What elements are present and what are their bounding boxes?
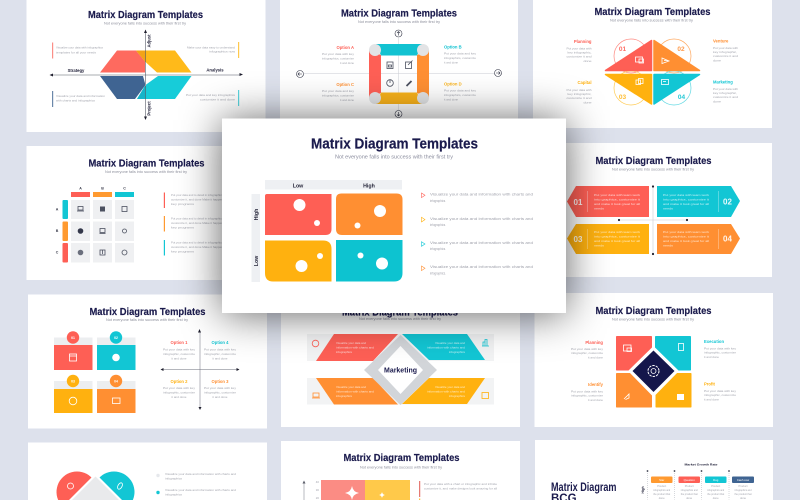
bullets and notes: infographics <box>165 476 183 480</box>
bullet 3: Visualize your data and information with charts and <box>430 241 533 245</box>
circle icons <box>68 482 123 490</box>
heading: Matrix Diagram Templates <box>594 6 711 18</box>
panel: main matrix slide <box>222 118 566 313</box>
side notes: customize it, and done Make it happen <box>171 198 223 202</box>
parallelogram yellow: infographics <box>449 394 466 398</box>
grid header and rows: A <box>56 208 59 212</box>
column text: done <box>686 496 693 500</box>
grid header and rows <box>56 186 134 262</box>
subtitle: Not everyone falls into success with their first try <box>105 170 187 174</box>
side notes: key programs <box>171 250 195 254</box>
option labels: Option 1 <box>171 340 188 345</box>
column text: infographics and <box>653 488 671 492</box>
block 02 <box>97 331 136 370</box>
parallelogram orange: Visualize your data and <box>336 385 366 389</box>
tab 03: needs <box>594 244 605 248</box>
option labels: infographic, customize <box>204 352 236 356</box>
option labels: Option 2 <box>171 379 188 384</box>
side notes: Visualize your data and information <box>56 94 105 98</box>
labels: Execution <box>704 339 724 344</box>
parallelogram red <box>316 334 398 361</box>
red circle <box>56 471 98 500</box>
labels: Venture <box>713 38 729 44</box>
petal numbers <box>619 46 685 101</box>
axes <box>618 185 688 255</box>
tab 04: and make it look great for all <box>663 239 709 243</box>
marketing diamond <box>364 335 437 405</box>
tab 02: Put your data with team work <box>663 193 710 197</box>
option labels: infographics, customize <box>322 94 354 98</box>
tab 01: needs <box>594 206 605 210</box>
axis: 20 <box>316 496 319 500</box>
tab 04: into graphics, customize it <box>663 234 709 238</box>
block 03: 03 <box>71 379 75 383</box>
parallelogram red: information with charts and <box>336 346 374 350</box>
bullet 2: infographics. <box>430 223 446 227</box>
heading: Matrix Diagram Templates <box>344 452 460 464</box>
option labels: Option B <box>444 44 462 50</box>
column text: the product that <box>707 492 724 496</box>
column header: Low <box>293 184 304 190</box>
labels: customize it and <box>566 96 592 100</box>
option labels: it and done <box>444 60 458 64</box>
column text: Product <box>657 484 666 488</box>
parallelogram orange: information with charts and <box>336 390 374 394</box>
parallelogram teal <box>402 334 485 360</box>
column text: done <box>659 496 665 500</box>
option labels: it and done <box>444 98 458 102</box>
quadrant: high high <box>336 194 402 235</box>
block 04 <box>97 375 136 413</box>
labels: key infographic, <box>713 50 737 54</box>
subtitle: Not everyone falls into success with their first try <box>359 317 441 321</box>
option labels: infographic, customize <box>204 390 236 394</box>
option labels: it and done <box>340 98 354 102</box>
column text: the product that <box>653 492 670 496</box>
side notes <box>52 42 239 107</box>
side notes: Make your data easy to understand <box>187 46 235 50</box>
labels: it and done <box>588 356 603 360</box>
panel: hexagon axis slide <box>26 0 266 132</box>
parallelogram orange <box>316 378 398 404</box>
side icons <box>312 340 489 398</box>
axis labels: Project <box>146 101 152 116</box>
heading: Matrix Diagram Templates <box>342 306 458 318</box>
side notes: Put your data and to detail in infographics <box>171 216 224 220</box>
labels: infographic, customize <box>571 351 603 355</box>
option labels: Put your data with key <box>204 348 237 352</box>
labels: Put your data with <box>566 88 592 92</box>
labels: done <box>584 100 592 104</box>
main heading: Matrix Diagram Templates <box>311 136 478 152</box>
axis labels <box>68 34 224 116</box>
side notes: infographics now <box>209 50 236 54</box>
option labels: Option D <box>444 82 462 86</box>
teal circle <box>93 471 134 500</box>
tab 01: Put your data with team work <box>594 193 641 197</box>
petal numbers: 03 <box>619 94 626 101</box>
petal numbers: 04 <box>678 94 685 101</box>
option labels: it and done <box>172 395 187 399</box>
column text: Product <box>711 484 720 488</box>
BCG heading <box>551 482 616 500</box>
tab 04: Put your data with team work <box>663 230 710 234</box>
labels: done <box>713 100 721 104</box>
axis <box>302 480 319 500</box>
subtitle: Not everyone falls into success with their first try <box>612 168 694 172</box>
column text: Product <box>738 484 748 488</box>
option labels <box>322 44 477 102</box>
column text: the product that <box>734 492 752 496</box>
tab 01 <box>567 186 649 217</box>
labels: Profit <box>704 382 716 386</box>
bullets and notes: Visualize your data and information with charts and <box>165 488 236 492</box>
labels: Marketing <box>713 80 733 84</box>
side notes: key programs <box>171 226 195 230</box>
bullets and notes: infographics <box>165 492 183 496</box>
option labels: Option C <box>336 82 354 87</box>
column text: the product that <box>681 492 698 496</box>
subtitle: Not everyone falls into success with their first try <box>612 318 694 322</box>
tab 02 <box>657 186 740 217</box>
axis labels: Strategy <box>68 68 85 73</box>
axis labels: Analysis <box>206 68 224 72</box>
bullet 1 <box>422 192 533 203</box>
rounded square frame <box>369 44 429 104</box>
grid header and rows: C <box>123 186 126 190</box>
parallelogram yellow <box>402 378 485 404</box>
panel: arrow tabs slide <box>545 143 772 277</box>
option labels <box>163 340 237 399</box>
row header: Low <box>254 255 260 266</box>
quadrant: low low <box>265 240 332 282</box>
marketing diamond: Marketing <box>384 366 417 374</box>
tab 02: into graphics, customize it <box>663 198 709 202</box>
column buttons: Star <box>659 478 664 482</box>
labels: customize it and <box>566 54 592 58</box>
grid header and rows: B <box>56 229 59 233</box>
option labels: Put your data and key <box>322 89 355 93</box>
panel: triangle petals slide <box>533 0 772 128</box>
parallelogram teal: infographics <box>449 350 466 354</box>
bullet 3 <box>422 241 533 251</box>
panel: chart slide <box>281 441 520 500</box>
side notes: Visualize your data with infographics <box>56 46 104 50</box>
main card shadow <box>222 120 566 314</box>
bullet 4: Visualize your data and information with charts and <box>430 265 533 269</box>
column text: Product <box>685 484 694 488</box>
labels: Put your data with <box>566 46 592 50</box>
bullet 4 <box>422 265 533 276</box>
labels: done <box>713 58 721 62</box>
matrix hexagon shapes <box>100 50 192 99</box>
labels: Put your data with key <box>704 346 737 350</box>
block 03 <box>54 375 92 413</box>
subtitle: Not everyone falls into success with their first try <box>106 318 188 322</box>
column text <box>653 484 752 500</box>
column buttons <box>651 476 754 483</box>
column buttons: Dog <box>713 478 719 482</box>
tab 03 <box>567 224 649 254</box>
labels: it and done <box>704 355 719 359</box>
labels: Put your data with <box>713 46 738 50</box>
column text: done <box>713 496 719 500</box>
panel: BCG slide <box>535 440 773 500</box>
axes <box>160 329 240 410</box>
axis: 40 <box>316 480 319 484</box>
tab 02: and make it look great for all <box>663 202 709 206</box>
icons in frame <box>387 60 412 86</box>
panel: four blocks slide <box>28 294 267 428</box>
side notes: Put your data and to detail in infographics <box>171 193 224 197</box>
labels: customize it and <box>713 54 738 58</box>
side notes: customize it, and done Make it happen <box>171 245 223 249</box>
axis markers <box>647 470 730 500</box>
petal icons <box>636 57 669 84</box>
side notes: customize it and done <box>200 98 235 102</box>
labels: it and done <box>704 398 719 402</box>
option labels: Option A <box>336 45 354 50</box>
tab 04: 04 <box>723 234 732 244</box>
grey bands <box>307 334 494 404</box>
labels: infographic, customize <box>704 350 736 354</box>
labels: done <box>584 59 592 63</box>
side notes: customize it, and done Make it happen <box>171 221 223 225</box>
labels: Put your data with key <box>571 347 604 351</box>
subtitle: Not everyone falls into success with their first try <box>360 466 442 470</box>
tab 04: needs <box>663 244 674 248</box>
side notes: key programs <box>171 202 195 206</box>
row header <box>252 194 260 282</box>
subtitle: Not everyone falls into success with their first try <box>358 20 440 24</box>
axis: 30 <box>316 488 319 492</box>
option labels: Put your data and key <box>444 52 477 56</box>
option labels: infographics, customize <box>322 56 354 60</box>
panel: square frame slide <box>280 0 518 119</box>
option labels: Option 3 <box>212 379 229 384</box>
option labels: Put your data with key <box>322 52 355 56</box>
matrix blocks <box>321 480 410 500</box>
labels: infographic, customize <box>571 394 603 398</box>
labels <box>571 339 737 402</box>
direction arrows <box>296 30 502 118</box>
quadrant: high low <box>265 194 332 235</box>
heading: Matrix Diagram Templates <box>90 306 206 318</box>
petal numbers: 01 <box>619 46 626 53</box>
center gear diamond <box>632 350 674 392</box>
side notes <box>164 192 224 256</box>
bullet 3: infographics. <box>430 247 446 251</box>
grey diamond <box>72 476 119 500</box>
grid header and rows: B <box>101 186 104 190</box>
petal numbers: 02 <box>677 46 685 53</box>
tab 01: 01 <box>574 198 583 207</box>
tab 02: needs <box>663 206 674 210</box>
parallelogram red: infographics <box>336 350 353 354</box>
panel: marketing diamond slide <box>281 290 520 427</box>
labels: key infographic, <box>568 92 592 96</box>
white diamond border <box>69 474 122 500</box>
subtitle: Not everyone falls into success with their first try <box>610 18 693 22</box>
option labels: Put your data with key <box>204 386 237 390</box>
tab 04 <box>657 224 740 254</box>
grid icons <box>77 206 127 255</box>
BCG heading: Matrix Diagram <box>551 482 616 494</box>
option labels: infographic, customize <box>163 352 195 356</box>
tab 02: 02 <box>723 198 732 206</box>
heading: Matrix Diagram Templates <box>596 305 712 317</box>
block 01: 01 <box>71 336 75 340</box>
option labels: Put your data with key <box>163 386 196 390</box>
bullet 4: infographics. <box>430 272 446 276</box>
option labels: infographic, customize <box>163 390 195 394</box>
labels: Put your data with <box>713 87 738 91</box>
BCG chart heading: Market Growth Rate <box>684 462 718 466</box>
labels: customize it and <box>713 95 738 99</box>
bullet 1: infographics. <box>430 199 446 203</box>
column text: infographics and <box>681 488 698 492</box>
notes <box>419 481 497 500</box>
cross lines <box>304 38 494 110</box>
bullet 2: Visualize your data and information with charts and <box>430 217 533 221</box>
quadrant icons <box>624 344 684 400</box>
option labels: Put your data and key <box>444 88 477 92</box>
parallelogram teal: Visualize your data and <box>435 341 465 345</box>
grid header and rows: C <box>56 250 59 254</box>
tab 03: Put your data with team work <box>594 230 641 234</box>
heading: Matrix Diagram Templates <box>596 155 712 167</box>
tab 03: 03 <box>574 235 583 244</box>
tab 01: and make it look great for all <box>594 202 640 206</box>
labels: key infographic, <box>713 91 737 95</box>
axes with arrows <box>50 30 243 120</box>
labels: Put your data with key <box>571 390 604 394</box>
labels: Capital <box>578 80 592 85</box>
column text: done <box>740 496 746 500</box>
option labels: infographics, customize <box>444 56 476 60</box>
bullets and notes <box>156 472 236 496</box>
column header: High <box>363 184 375 190</box>
triangles <box>606 40 700 104</box>
labels: it and done <box>588 398 603 402</box>
tab 01: into graphics, customize it <box>594 198 640 202</box>
grid header and rows: A <box>79 186 82 190</box>
heading: Matrix Diagram Templates <box>88 158 205 170</box>
block 04: 04 <box>114 379 118 383</box>
panel: circles and diamond slide <box>28 442 267 500</box>
parallelogram orange: infographics <box>336 394 353 398</box>
column buttons: Question <box>684 478 695 482</box>
option labels: Option 4 <box>212 340 229 345</box>
panel: gear center slide <box>534 293 773 427</box>
column header <box>265 180 402 190</box>
bullets and notes: Visualize your data and information with charts and <box>165 472 236 476</box>
quadrant squares <box>616 336 692 408</box>
option labels: it and done <box>340 61 354 65</box>
column buttons: Cash cow <box>737 478 750 482</box>
parallelogram yellow: Visualize your data and <box>435 385 465 389</box>
labels: Identify <box>588 382 604 387</box>
block 01 <box>54 331 92 370</box>
side notes: Put your data and to detail in infographics <box>171 240 224 244</box>
labels: key infographic, <box>568 50 592 54</box>
notes: Put your data with a chart or infographic and infinite <box>424 482 497 486</box>
block 02: 02 <box>114 336 118 340</box>
option labels: it and done <box>172 356 187 360</box>
bullet 1: Visualize your data and information with charts and <box>430 192 533 196</box>
row header: High <box>254 209 260 220</box>
heading: Matrix Diagram Templates <box>341 8 457 20</box>
side notes: Put your data and key infographics <box>186 93 236 97</box>
labels: Put your data with key <box>704 389 737 393</box>
main subtitle: Not everyone falls into success with their first try <box>335 154 454 160</box>
labels: Planning <box>574 39 592 44</box>
option labels: infographics, customize <box>444 93 476 97</box>
tab 03: into graphics, customize it <box>594 234 640 238</box>
option labels: Put your data with key <box>163 348 196 352</box>
tab 03: and make it look great for all <box>594 239 640 243</box>
option labels: it and done <box>212 356 228 360</box>
outline petals <box>614 39 691 105</box>
axis labels: Adjust <box>146 34 152 48</box>
parallelogram yellow: information with charts and <box>427 390 465 394</box>
parallelogram teal: information with charts and <box>427 346 465 350</box>
notes: customize it, and make designs look amazing for all <box>424 486 497 490</box>
column text: infographics and <box>734 488 752 492</box>
heading: Matrix Diagram Templates <box>88 9 203 21</box>
side notes: with charts and infographics <box>56 98 96 102</box>
labels: Planning <box>585 340 603 345</box>
option labels: it and done <box>212 395 228 399</box>
panel: icon grid slide <box>26 146 236 280</box>
column text: infographics and <box>707 488 725 492</box>
bullet 2 <box>422 217 533 227</box>
quadrant: low high <box>336 240 402 282</box>
side notes: templates for all your needs <box>56 50 97 54</box>
labels <box>566 38 738 104</box>
side label: High <box>641 486 645 494</box>
labels: infographic, customize <box>704 393 736 397</box>
parallelogram red: Visualize your data and <box>336 341 366 345</box>
bullet list <box>422 192 533 276</box>
subtitle: Not everyone falls into success with their first try <box>104 22 186 26</box>
